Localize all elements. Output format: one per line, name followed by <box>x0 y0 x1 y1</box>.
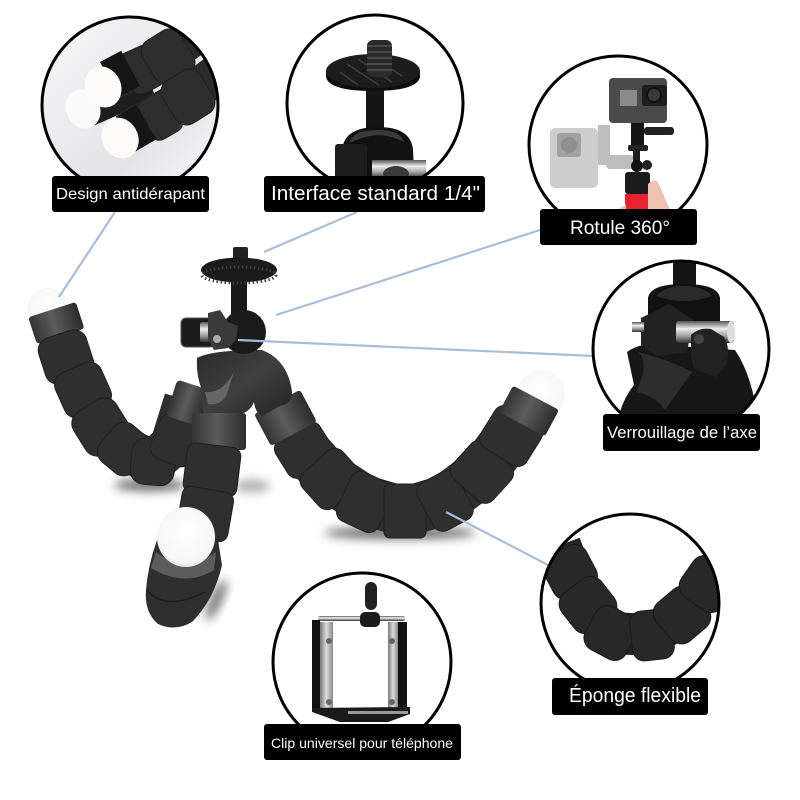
phone clip photo <box>312 582 410 722</box>
label <box>603 414 760 451</box>
line: ball head <box>276 230 540 315</box>
screw mount photo <box>326 40 426 190</box>
label: Éponge flexible <box>569 684 701 707</box>
camera photo <box>550 78 674 214</box>
line: anti-slip <box>59 212 115 297</box>
panel: axis lock <box>593 261 769 451</box>
panel: standard interface <box>264 15 485 212</box>
label <box>264 176 485 212</box>
label <box>264 724 461 760</box>
right leg <box>254 370 565 538</box>
line: axis lock <box>238 340 594 356</box>
label <box>552 678 708 715</box>
front leg <box>146 413 246 628</box>
lock knob photo <box>618 262 758 420</box>
label: Interface standard 1/4" <box>271 183 480 205</box>
ball head and mount screw <box>181 247 277 354</box>
leader lines <box>59 212 594 566</box>
ground shadows <box>114 479 476 622</box>
panel: anti-slip design <box>42 17 225 212</box>
panel: flexible sponge <box>540 512 720 715</box>
left leg <box>27 288 210 487</box>
feet detail photo <box>66 28 216 158</box>
tripod hub <box>197 350 292 416</box>
label: Rotule 360° <box>570 218 670 239</box>
foam segments photo <box>546 538 718 662</box>
main product: flexible tripod <box>27 247 565 628</box>
panel: universal phone clip <box>264 573 461 760</box>
panel: 360 ball head <box>529 56 707 245</box>
line: sponge <box>446 512 550 566</box>
line: interface <box>264 212 357 252</box>
label: Clip universel pour téléphone <box>271 735 453 751</box>
label: Design antidérapant <box>56 186 206 203</box>
label <box>52 176 209 212</box>
label: Verrouillage de l’axe <box>607 424 757 442</box>
label <box>540 209 697 245</box>
